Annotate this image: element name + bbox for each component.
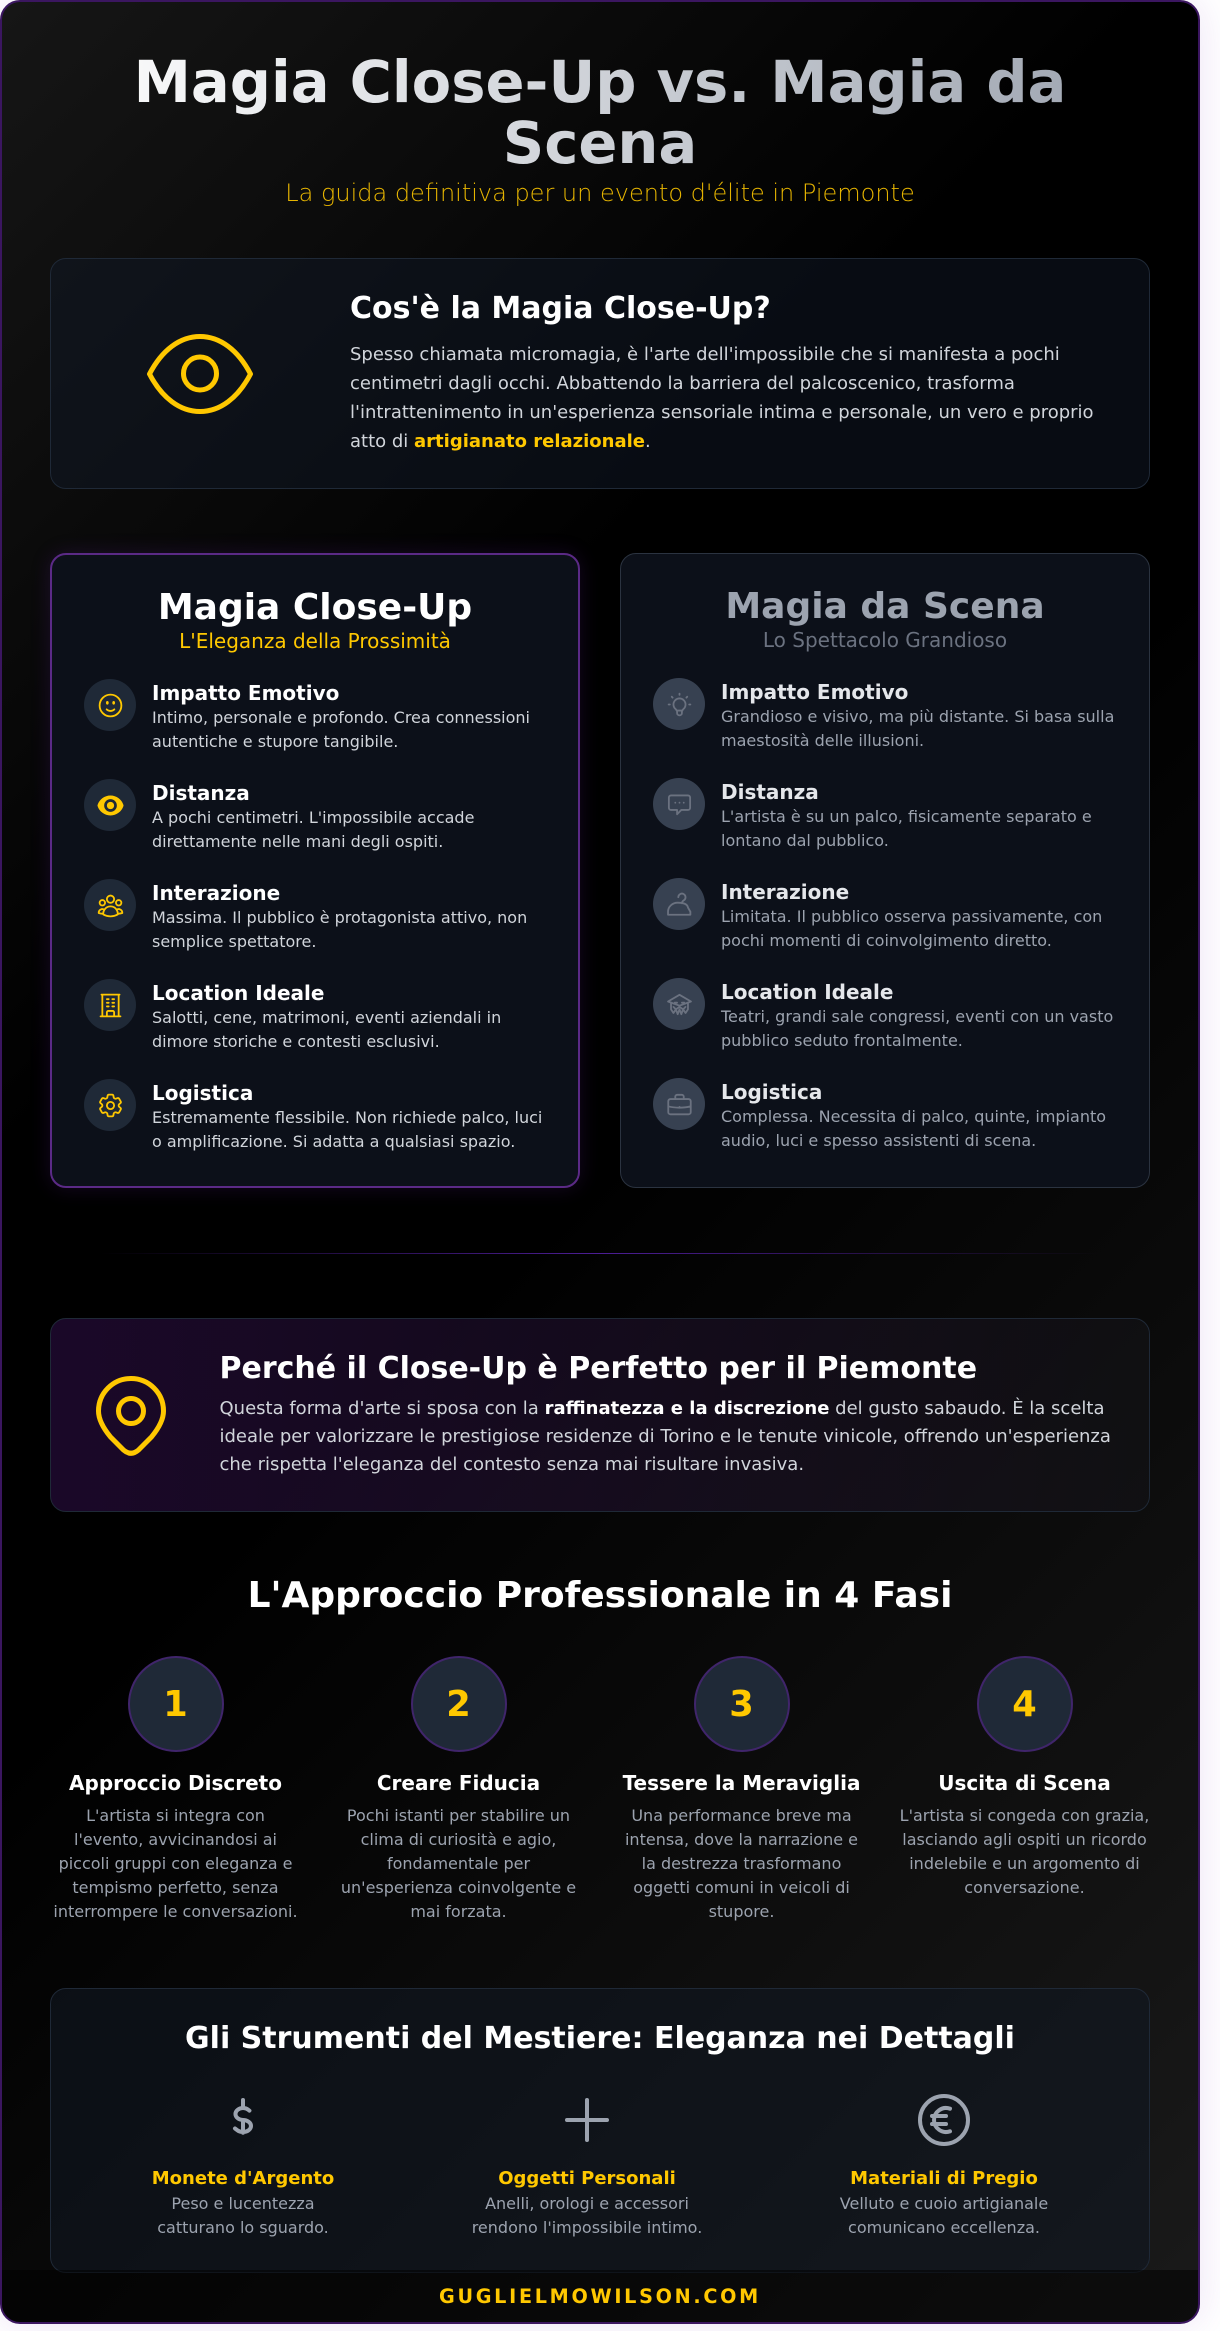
step 3: intensa, dove la narrazione e [625,1830,858,1849]
item: interazione: Interazione [152,881,280,905]
icon: building [84,979,136,1031]
tool: monete d'argento: catturano lo sguardo. [157,2218,329,2237]
item: logistica: Logistica [721,1080,822,1104]
text block: Spesso chiamata micromagia, è l'arte dell'impossibile che si manifesta a pochi [350,344,1060,364]
item: impatto emotivo: Grandioso e visivo, ma più distante. Si basa sulla [721,707,1114,726]
item: location ideale: Salotti, cene, matrimoni, eventi aziendali in [152,1008,501,1027]
step 4: L'artista si congeda con grazia, [900,1806,1149,1825]
text block [220,1398,1111,1475]
item: distanza [84,779,474,851]
icon: academic cap [653,978,705,1030]
icon: light bulb [653,678,705,730]
tool: materiali di pregio: Velluto e cuoio artigianale [840,2194,1048,2213]
step 3: Tessere la Meraviglia [623,1771,860,1795]
step 2: un'esperienza coinvolgente e [341,1878,576,1897]
step 4: indelebile e un argomento di [909,1854,1140,1873]
item: location ideale: Location Ideale [152,981,324,1005]
item: distanza: direttamente nelle mani degli ospiti. [152,832,443,851]
item: location ideale: Teatri, grandi sale congressi, eventi con un vasto [721,1007,1113,1026]
icon: smile [84,679,136,731]
step 3: oggetti comuni in veicoli di [633,1878,850,1897]
tool: materiali di pregio [840,2094,1048,2237]
step 2: Pochi istanti per stabilire un [347,1806,570,1825]
step 1: l'evento, avvicinandosi ai [74,1830,277,1849]
panel: strumenti del mestiere [50,1988,1150,2273]
item: impatto emotivo [653,678,1114,750]
text block: che rispetta l'eleganza del contesto senza mai risultare invasiva. [220,1454,804,1475]
item: interazione: Massima. Il pubblico è protagonista attivo, non [152,908,527,927]
step 3: Una performance breve ma [631,1806,852,1825]
icon: eye [147,334,253,414]
step 3 [622,1656,860,1921]
item: interazione: pochi momenti di coinvolgimento diretto. [721,931,1052,950]
step 1: piccoli gruppi con eleganza e [59,1854,292,1873]
step 2: Creare Fiducia [377,1771,540,1795]
item: location ideale: Location Ideale [721,980,893,1004]
icon: briefcase [653,1078,705,1130]
text block [350,344,1094,452]
step 3: stupore. [709,1902,774,1921]
step number: 2 [446,1684,471,1725]
step number [128,1656,224,1752]
step 4: conversazione. [964,1878,1085,1897]
step number: 1 [163,1684,188,1725]
item: impatto emotivo [84,679,530,751]
step number [976,1656,1072,1752]
step 3: la destrezza trasformano [642,1854,841,1873]
tool: oggetti personali [472,2098,702,2237]
icon: dollar [232,2098,253,2135]
card subtitle: Lo Spettacolo Grandioso [763,628,1007,652]
text block: l'intrattenimento in un'esperienza sensoriale intima e personale, un vero e proprio [350,402,1094,423]
item: location ideale: dimore storiche e contesti esclusivi. [152,1032,440,1051]
item: location ideale [84,979,501,1051]
item: distanza: Distanza [721,780,819,804]
item: impatto emotivo: Impatto Emotivo [152,681,339,705]
heading: Perché il Close-Up è Perfetto per il Piemonte [220,1351,977,1386]
step 4 [900,1656,1149,1897]
item: interazione: semplice spettatore. [152,932,316,951]
item: distanza: lontano dal pubblico. [721,831,889,850]
step 1: Approccio Discreto [69,1771,282,1795]
item: interazione: Interazione [721,880,849,904]
website: GUGLIELMOWILSON.COM [439,2285,761,2308]
item: logistica: Complessa. Necessita di palco, quinte, impianto [721,1107,1106,1126]
step number: 3 [729,1684,754,1725]
icon: group of people [84,879,136,931]
icon: plus [565,2098,609,2142]
tool: monete d'argento: Monete d'Argento [152,2168,334,2189]
title: Scena [503,110,697,177]
item: distanza [653,778,1092,850]
text block: Questa forma d'arte si sposa con la raffinatezza e la discrezione del gusto sabaudo. È la scelta [220,1398,1104,1419]
step 2 [341,1656,576,1921]
item: impatto emotivo: Impatto Emotivo [721,680,908,704]
card subtitle: L'Eleganza della Prossimità [179,629,451,653]
item: interazione [84,879,527,951]
item: location ideale [653,978,1113,1050]
item: logistica [84,1079,542,1151]
item: impatto emotivo: autentiche e stupore tangibile. [152,732,398,751]
panel: perché il close-up in piemonte [50,1318,1150,1512]
step number [410,1656,506,1752]
icon: map pin [96,1376,166,1456]
icon: euro [918,2094,970,2146]
step 1: L'artista si integra con [86,1806,265,1825]
step 4: Uscita di Scena [938,1771,1111,1795]
item: logistica: o amplificazione. Si adatta a qualsiasi spazio. [152,1132,515,1151]
heading: Cos'è la Magia Close-Up? [350,291,771,326]
item: impatto emotivo: maestosità delle illusioni. [721,731,924,750]
tool: oggetti personali: rendono l'impossibile intimo. [472,2218,702,2237]
icon: speech bubble [653,778,705,830]
icon: solid eye [84,779,136,831]
step 4: lasciando agli ospiti un ricordo [902,1830,1147,1849]
icon: hanger [653,878,705,930]
tool: materiali di pregio: Materiali di Pregio [850,2168,1038,2189]
item: location ideale: pubblico seduto frontalmente. [721,1031,963,1050]
step number: 4 [1012,1684,1037,1725]
tool: monete d'argento: Peso e lucentezza [171,2194,315,2213]
panel: magia close-up [50,553,580,1188]
section heading: L'Approccio Professionale in 4 Fasi [248,1575,952,1616]
tool: materiali di pregio: comunicano eccellenza. [848,2218,1040,2237]
footer [2,2270,1198,2322]
step 2: fondamentale per [387,1854,530,1873]
step 2: clima di curiosità e agio, [361,1830,556,1849]
card heading: Magia Close-Up [158,587,472,628]
title [50,52,1150,174]
item: distanza: A pochi centimetri. L'impossibile accade [152,808,474,827]
step 1: tempismo perfetto, senza [72,1878,279,1897]
tools heading: Gli Strumenti del Mestiere: Eleganza nei Dettagli [185,2021,1015,2056]
item: distanza: Distanza [152,781,250,805]
step 1: interrompere le conversazioni. [53,1902,298,1921]
tool: oggetti personali: Oggetti Personali [498,2168,676,2189]
text block: ideale per valorizzare le prestigiose residenze di Torino e le tenute vinicole, offrendo un'esperienza [220,1426,1111,1447]
icon: gear [84,1079,136,1131]
title: Magia Close-Up vs. Magia da [134,49,1066,116]
item: interazione [653,878,1102,950]
item: logistica: Logistica [152,1081,253,1105]
item: logistica: audio, luci e spesso assistenti di scena. [721,1131,1036,1150]
tool: monete d'argento [152,2098,334,2237]
panel: magia da scena [620,553,1150,1188]
text block: centimetri dagli occhi. Abbattendo la barriera del palcoscenico, trasforma [350,373,1015,394]
tool: oggetti personali: Anelli, orologi e accessori [485,2194,689,2213]
item: logistica: Estremamente flessibile. Non richiede palco, luci [152,1108,542,1127]
item: distanza: L'artista è su un palco, fisicamente separato e [721,807,1092,826]
step 2: mai forzata. [410,1902,507,1921]
step number [694,1656,790,1752]
item: impatto emotivo: Intimo, personale e profondo. Crea connessioni [152,708,530,727]
panel: cos'è la magia close-up [50,258,1150,489]
item: interazione: Limitata. Il pubblico osserva passivamente, con [721,907,1102,926]
item: logistica [653,1078,1106,1150]
card heading: Magia da Scena [725,586,1045,627]
subtitle: La guida definitiva per un evento d'élite in Piemonte [285,179,915,207]
text block: atto di artigianato relazionale. [350,431,651,452]
step 1 [53,1656,298,1921]
